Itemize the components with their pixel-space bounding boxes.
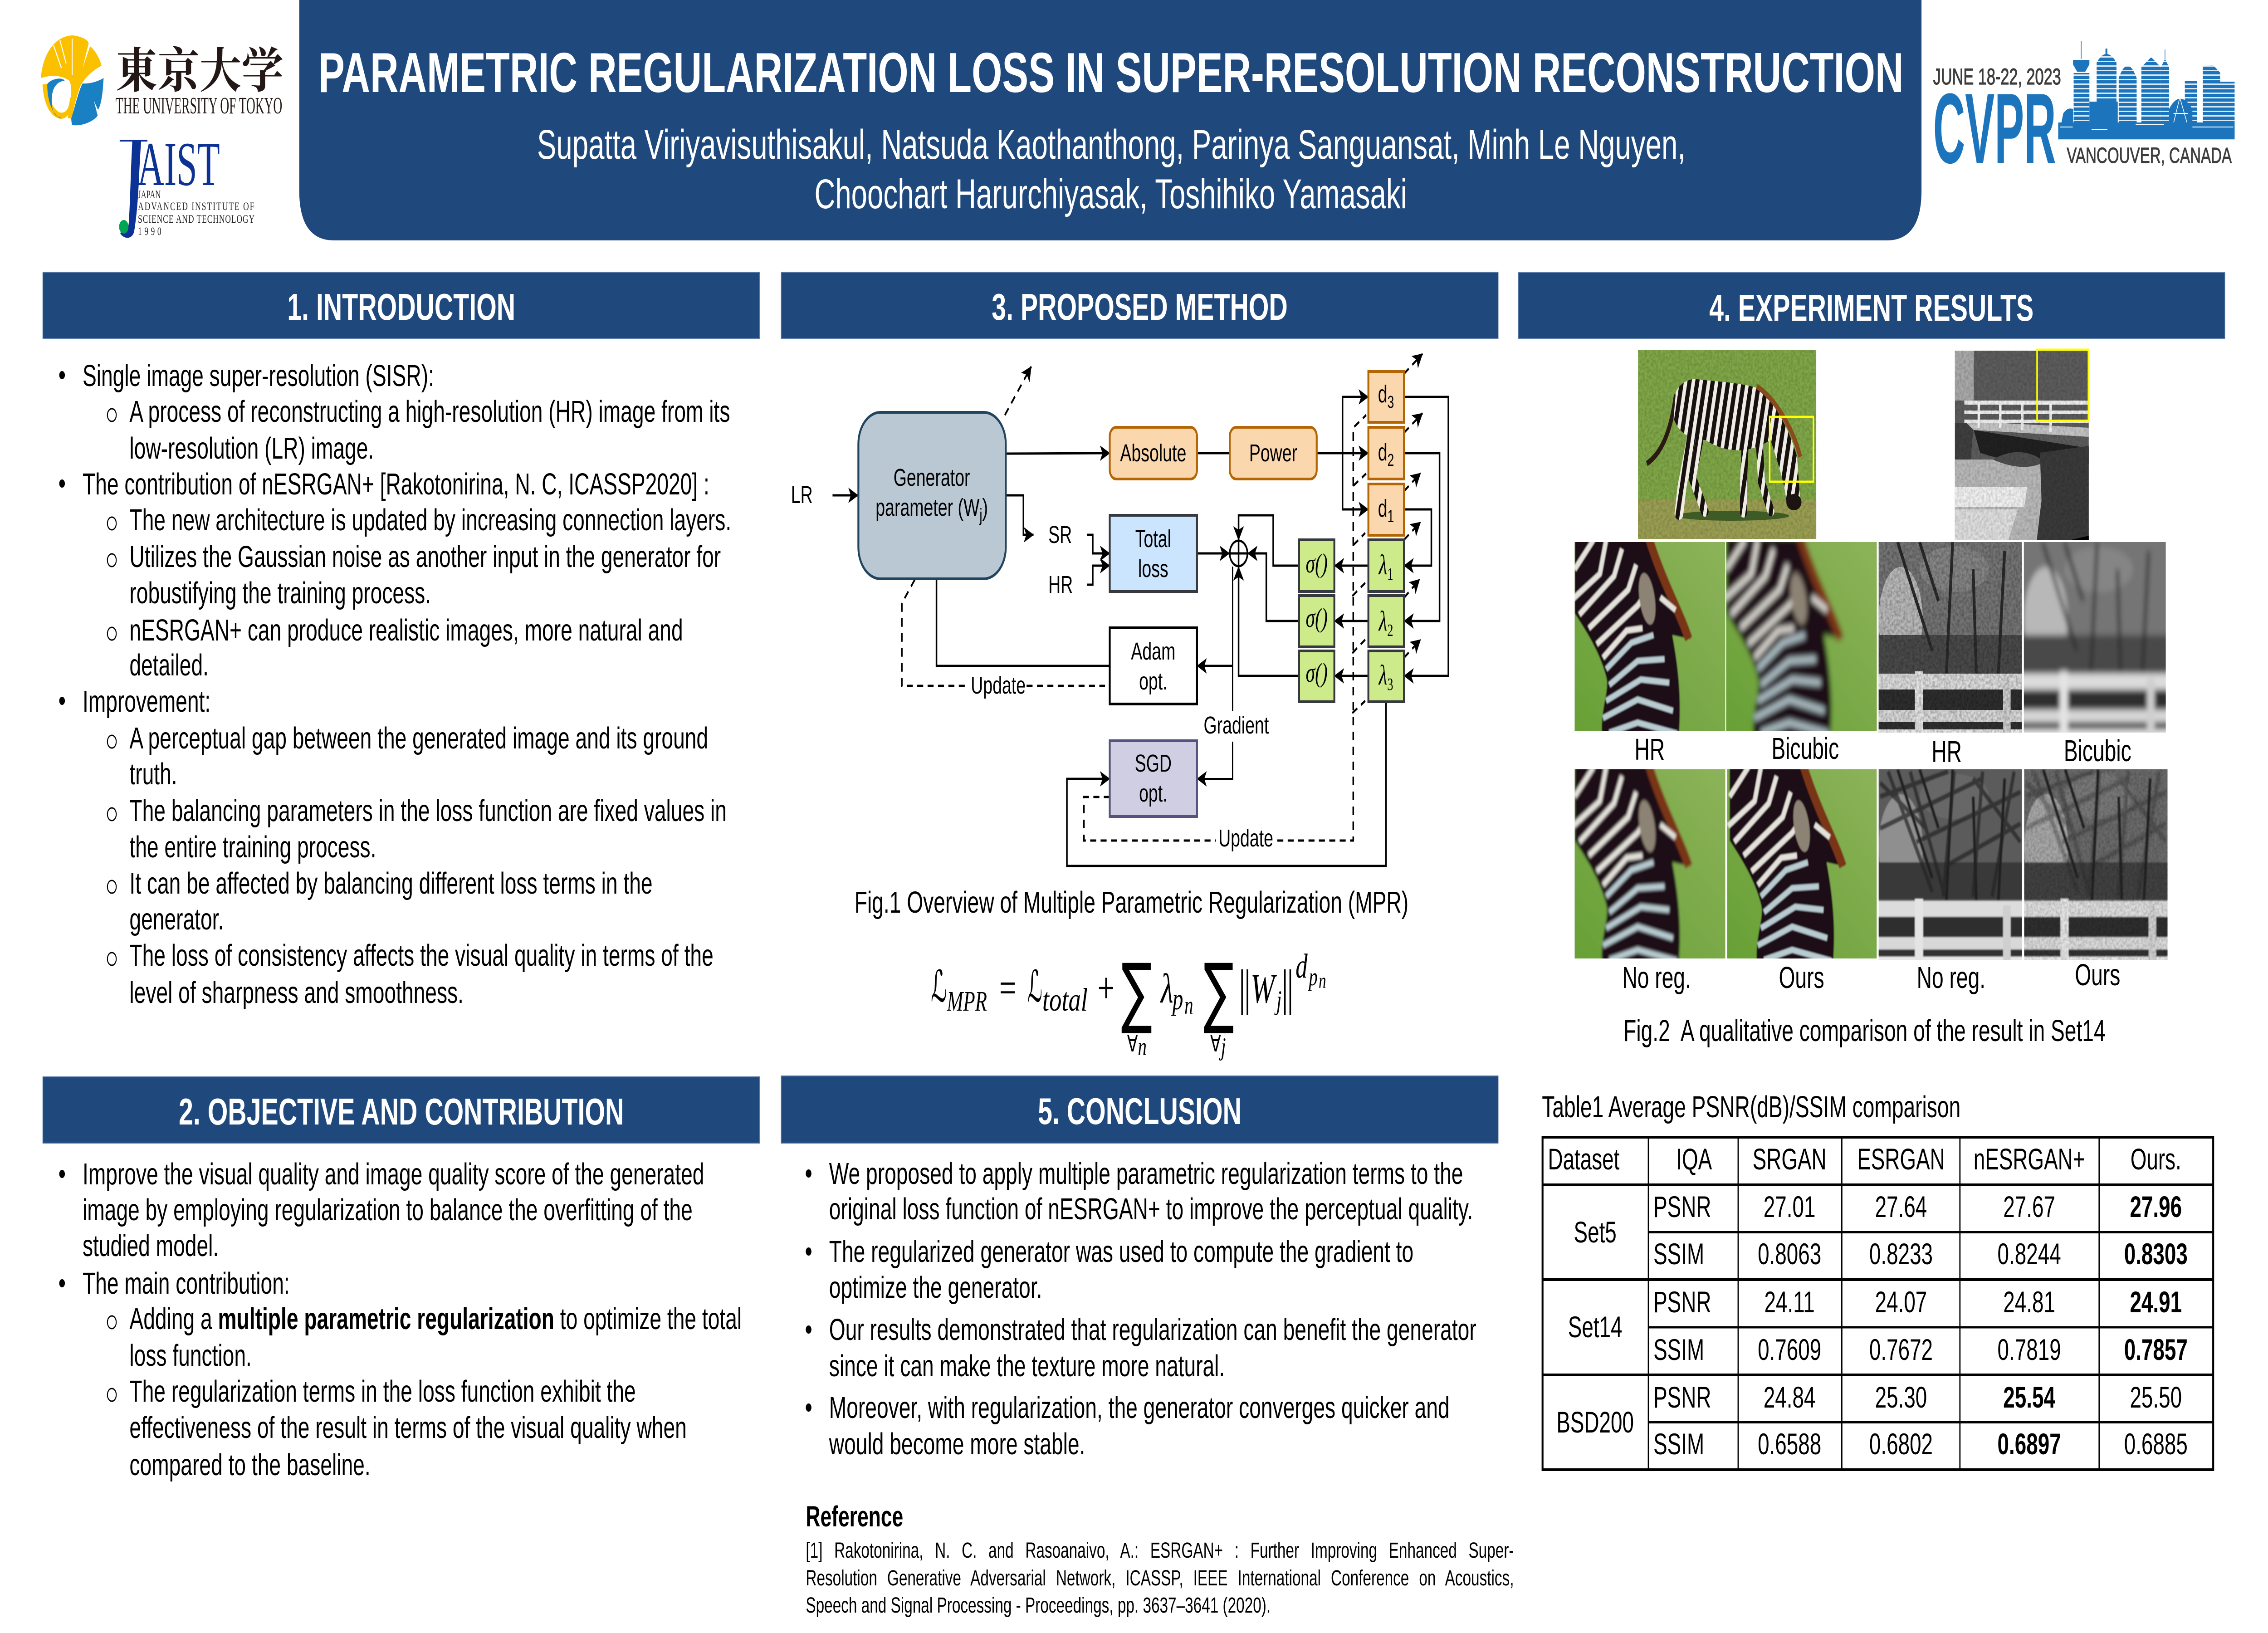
- formula: MPR loss: p: [1171, 982, 1183, 1016]
- label: gradient: Gradient: [1203, 711, 1269, 739]
- intro text: The balancing parameters in the loss function are fixed values in: [129, 794, 727, 828]
- boxes: sigma functions: σ(): [1306, 603, 1328, 633]
- image: zebra full: [1638, 350, 1816, 539]
- table rows: Set14: 24.81: [2003, 1286, 2055, 1319]
- intro text: Improvement:: [83, 685, 210, 719]
- formula: MPR loss: ∑: [1203, 947, 1234, 1037]
- box: power: Power: [1249, 439, 1297, 467]
- JAIST full name: 1990: [138, 225, 161, 238]
- letter J: [120, 140, 147, 238]
- boxes: sigma functions: σ(): [1306, 658, 1328, 688]
- bullet markers: [806, 1169, 811, 1412]
- intro text: detailed.: [129, 649, 209, 682]
- formula: MPR loss: MPR: [947, 985, 987, 1017]
- conclusion text: The regularized generator was used to compute the gradient to: [829, 1235, 1413, 1269]
- heading bar: [781, 272, 1498, 338]
- heading bar: [1518, 273, 2225, 338]
- formula: MPR loss: +: [1097, 963, 1114, 1012]
- image: zebra no-reg crop: [1565, 756, 1735, 973]
- table header row: IQA: [1676, 1143, 1712, 1176]
- table rows: BSD200: 24.84: [1764, 1381, 1815, 1414]
- table rows: Set5: [1574, 1191, 2188, 1271]
- heading bar: 1. INTRODUCTION: [287, 287, 515, 328]
- text block: reference citation: [1] Rakotonirina, N. C. and Rasoanaivo, A.: ESRGAN+ : Further Improving Enhanced Super-: [806, 1539, 1514, 1563]
- panel: 1. Introduction: [43, 272, 759, 1010]
- image: zebra bicubic crop: [1717, 528, 1887, 746]
- table rows: BSD200: 0.6885: [2124, 1428, 2188, 1461]
- logo: The University of Tokyo: [41, 33, 284, 125]
- formula: MPR loss: d: [1295, 948, 1308, 985]
- box: absolute: [1110, 427, 1197, 479]
- table rows: Set5: 27.96: [2130, 1191, 2182, 1224]
- table rows: Set5: 0.8244: [1998, 1238, 2061, 1271]
- heading bar: 5. CONCLUSION: [1038, 1091, 1242, 1133]
- boxes: lambda terms: 3: [1387, 675, 1393, 694]
- objective text: The main contribution:: [83, 1267, 290, 1301]
- boxes: sigma functions: [1299, 540, 1334, 702]
- objective text: [83, 1158, 742, 1482]
- table rows: BSD200: SSIM: [1653, 1428, 1704, 1461]
- JAIST full name: SCIENCE AND TECHNOLOGY: [138, 213, 254, 225]
- dashed update connectors: [902, 354, 1422, 841]
- table rows: Set5: 27.64: [1875, 1191, 1927, 1224]
- label: HR: HR: [1048, 571, 1073, 598]
- table rows: Set5: 0.8233: [1869, 1238, 1933, 1271]
- table rows: Set14: 0.7672: [1869, 1334, 1933, 1367]
- CVPR wordmark: CVPR: [1933, 73, 2056, 185]
- conclusion text: original loss function of nESRGAN+ to improve the perceptual quality.: [829, 1193, 1473, 1226]
- image: bridge no-reg crop: [1869, 756, 2033, 973]
- intro text: The new architecture is updated by increasing connection layers.: [129, 504, 731, 537]
- table header row: SRGAN: [1753, 1143, 1827, 1176]
- table rows: Set14: 24.91: [2130, 1286, 2182, 1319]
- formula: MPR loss: j: [1219, 1033, 1226, 1061]
- table header row: Ours.: [2131, 1143, 2181, 1176]
- table rows: Set14: Set14: [1568, 1311, 1623, 1344]
- heading bar: 3. PROPOSED METHOD: [992, 287, 1288, 328]
- intro text: level of sharpness and smoothness.: [129, 976, 464, 1010]
- intro text: low-resolution (LR) image.: [129, 432, 374, 465]
- intro text: A process of reconstructing a high-resolution (HR) image from its: [129, 395, 730, 429]
- boxes: d terms: d: [1378, 494, 1388, 522]
- image: zebra ours crop: [1720, 756, 1889, 973]
- formula: MPR loss: =: [999, 963, 1016, 1012]
- image: bridge bicubic crop: [2014, 528, 2177, 746]
- formula: MPR loss: ∀: [1210, 1031, 1221, 1057]
- table rows: BSD200: 0.6897: [1998, 1428, 2061, 1461]
- JAIST full name: [138, 188, 254, 238]
- diagram: MPR overview: [791, 354, 1448, 866]
- letters AIST: AIST: [137, 129, 220, 199]
- heading bar: [43, 1077, 759, 1143]
- image: zebra HR crop: [1575, 542, 1725, 731]
- caption: Table 1: Table1 Average PSNR(dB)/SSIM comparison: [1542, 1090, 1960, 1124]
- boxes: d terms: 1: [1388, 506, 1394, 526]
- table rows: Set5: 0.8303: [2124, 1238, 2188, 1271]
- table rows: Set5: Set5: [1574, 1216, 1617, 1249]
- marker: bridge zoom box: [2037, 350, 2088, 421]
- table rows: Set5: SSIM: [1653, 1238, 1704, 1271]
- box: Adam optimizer: [1110, 628, 1197, 704]
- box: power: [1230, 427, 1317, 479]
- table rows: Set5: PSNR: [1653, 1191, 1711, 1224]
- box: total loss: loss: [1138, 555, 1168, 582]
- authors: [537, 121, 1686, 217]
- box: SGD optimizer: opt.: [1139, 779, 1168, 807]
- formula: MPR loss: ℒ: [1027, 962, 1042, 1012]
- label: HR bridge: HR: [1931, 735, 1962, 769]
- formula: MPR loss: p: [1308, 963, 1318, 991]
- bullet markers: [59, 1170, 116, 1401]
- formula: MPR loss: total: [1042, 982, 1088, 1018]
- table rows: Set14: [1568, 1286, 2188, 1367]
- conclusion text: Our results demonstrated that regularization can benefit the generator: [829, 1313, 1476, 1347]
- table rows: BSD200: 25.30: [1875, 1381, 1927, 1414]
- objective text: The regularization terms in the loss function exhibit the: [129, 1375, 636, 1408]
- box: generator parameter: parameter (W: [875, 494, 979, 521]
- location: VANCOUVER, CANADA: [2067, 143, 2232, 167]
- conclusion text: since it can make the texture more natural.: [829, 1349, 1225, 1383]
- label: no reg bridge: No reg.: [1917, 961, 1985, 995]
- panel: poster header: [299, 0, 1921, 240]
- boxes: lambda terms: λ: [1379, 659, 1387, 691]
- label: update left: Update: [971, 671, 1026, 699]
- intro text: the entire training process.: [129, 831, 376, 864]
- panel: 4. Experiment results: [1518, 273, 2225, 1470]
- label: SR: SR: [1048, 521, 1072, 548]
- JAIST full name: ADVANCED INSTITUTE OF: [138, 200, 254, 213]
- intro text: [83, 359, 731, 1010]
- box: generator parameter: j: [979, 505, 982, 525]
- boxes: lambda terms: λ: [1379, 605, 1387, 637]
- label: HR zebra: HR: [1634, 733, 1665, 767]
- table rows: BSD200: PSNR: [1653, 1381, 1711, 1414]
- table rows: Set14: PSNR: [1653, 1286, 1711, 1319]
- intro text: The loss of consistency affects the visual quality in terms of the: [129, 939, 714, 973]
- panel: 2. Objective and contribution: [43, 1077, 759, 1482]
- caption: Fig.1: Fig.1 Overview of Multiple Parametric Regularization (MPR): [855, 886, 1408, 919]
- formula: MPR loss: n: [1184, 992, 1193, 1020]
- logo: JAIST: [119, 129, 254, 238]
- label: bicubic bridge: Bicubic: [2064, 734, 2131, 768]
- boxes: d terms: [1369, 372, 1404, 535]
- box: generator parameter: ): [982, 494, 988, 521]
- text block: reference citation: Resolution Generative Adversarial Network, ICASSP, IEEE International Conference on Acoustics,: [806, 1566, 1514, 1590]
- text block: reference citation: Speech and Signal Processing - Proceedings, pp. 3637–3641 (2020).: [806, 1594, 1271, 1618]
- table header row: ESRGAN: [1857, 1143, 1945, 1176]
- formula: MPR loss: n: [1138, 1033, 1147, 1061]
- kanji wordmark: 東京大学: [116, 33, 284, 102]
- authors: Supatta Viriyavisuthisakul, Natsuda Kaothanthong, Parinya Sanguansat, Minh Le Nguyen,: [537, 121, 1686, 168]
- table rows: Set14: 0.7857: [2124, 1334, 2188, 1367]
- intro text: generator.: [129, 903, 224, 936]
- title: PARAMETRIC REGULARIZATION LOSS IN SUPER-RESOLUTION RECONSTRUCTION: [318, 41, 1904, 104]
- heading bar: 4. EXPERIMENT RESULTS: [1709, 288, 2033, 329]
- table header row: nESRGAN+: [1974, 1143, 2085, 1176]
- table rows: Set5: 0.8063: [1758, 1238, 1821, 1271]
- formula: MPR loss: j: [1274, 986, 1281, 1016]
- boxes: lambda terms: [1369, 540, 1404, 702]
- conclusion text: We proposed to apply multiple parametric regularization terms to the: [829, 1157, 1463, 1191]
- panel: 5. Conclusion: [781, 1076, 1514, 1621]
- boxes: lambda terms: 1: [1387, 565, 1393, 584]
- box: Adam optimizer: opt.: [1139, 667, 1168, 695]
- box: generator parameter: Generator: [894, 464, 970, 491]
- label: ours bridge: Ours: [2075, 958, 2120, 992]
- objective text: image by employing regularization to balance the overfitting of the: [83, 1193, 693, 1227]
- marker: zebra zoom box: [1769, 417, 1813, 482]
- date: JUNE 18-22, 2023: [1933, 64, 2061, 90]
- label: update bottom: Update: [1218, 824, 1273, 852]
- table rows: Set14: 0.7609: [1758, 1334, 1821, 1367]
- sub-bullet markers: [108, 409, 116, 965]
- intro text: It can be affected by balancing different loss terms in the: [129, 867, 653, 900]
- box: SGD optimizer: SGD: [1135, 749, 1172, 777]
- boxes: d terms: d: [1378, 380, 1388, 408]
- boxes: lambda terms: 2: [1387, 621, 1393, 640]
- label: no reg zebra: No reg.: [1622, 961, 1691, 995]
- intro text: The contribution of nESRGAN+ [Rakotonirina, N. C, ICASSP2020] :: [83, 468, 709, 501]
- intro text: A perceptual gap between the generated image and its ground: [129, 722, 708, 755]
- box: absolute: Absolute: [1120, 439, 1186, 467]
- panel: 3. Proposed method: [781, 272, 1498, 1061]
- logo: CVPR 2023: [1933, 41, 2234, 185]
- table rows: Set5: 27.01: [1764, 1191, 1815, 1224]
- objective text: loss function.: [129, 1339, 252, 1373]
- table rows: BSD200: 25.54: [2003, 1381, 2055, 1414]
- formula: MPR loss: ℒ: [931, 962, 947, 1012]
- formula: MPR loss: λ: [1160, 966, 1173, 1012]
- icon: Vancouver skyline: [2058, 41, 2234, 140]
- objective text: Improve the visual quality and image quality score of the generated: [83, 1158, 704, 1191]
- table rows: Set14: 0.7819: [1998, 1334, 2061, 1367]
- objective text: studied model.: [83, 1229, 219, 1263]
- conclusion text: optimize the generator.: [829, 1271, 1042, 1305]
- intro text: robustifying the training process.: [129, 577, 431, 610]
- table rows: Set14: 24.11: [1765, 1286, 1815, 1319]
- green dot: [119, 220, 128, 234]
- box: total loss: Total: [1135, 525, 1171, 552]
- intro text: nESRGAN+ can produce realistic images, more natural and: [129, 614, 683, 647]
- formula: MPR loss: [931, 947, 1326, 1061]
- boxes: d terms: 3: [1388, 392, 1394, 411]
- heading bar: [781, 1076, 1498, 1143]
- label: bicubic zebra: Bicubic: [1771, 732, 1839, 766]
- table rows: BSD200: 25.50: [2130, 1381, 2182, 1414]
- formula: MPR loss: W: [1251, 966, 1277, 1012]
- table rows: BSD200: 0.6802: [1869, 1428, 1933, 1461]
- intro text: Single image super-resolution (SISR):: [83, 359, 434, 393]
- bullet markers: [59, 371, 65, 705]
- boxes: lambda terms: λ: [1379, 549, 1387, 581]
- table rows: BSD200: BSD200: [1556, 1406, 1634, 1439]
- conclusion text: Moreover, with regularization, the generator converges quicker and: [829, 1391, 1450, 1425]
- icon: ginkgo emblem: [41, 35, 103, 125]
- objective text: Adding a multiple parametric regularization to optimize the total: [129, 1302, 742, 1336]
- table rows: BSD200: 0.6588: [1758, 1428, 1821, 1461]
- objective text: compared to the baseline.: [129, 1448, 371, 1482]
- header banner background: [299, 0, 1921, 240]
- table header row: Dataset: [1548, 1143, 1620, 1176]
- label: ours zebra: Ours: [1779, 961, 1824, 995]
- image: bridge HR crop: [1869, 528, 2033, 746]
- JAIST full name: JAPAN: [138, 188, 161, 201]
- table rows: Set14: SSIM: [1653, 1334, 1704, 1367]
- heading: reference: Reference: [806, 1500, 903, 1533]
- authors: Choochart Harurchiyasak, Toshihiko Yamasaki: [814, 170, 1407, 217]
- image: bridge full: [1955, 351, 2089, 540]
- English wordmark: THE UNIVERSITY OF TOKYO: [116, 93, 282, 119]
- box: generator parameter: [858, 412, 1006, 579]
- table: PSNR / SSIM comparison: [1543, 1137, 2213, 1470]
- formula: MPR loss: ∀: [1127, 1031, 1138, 1057]
- table rows: BSD200: [1556, 1381, 2188, 1461]
- conclusion text: would become more stable.: [829, 1428, 1085, 1461]
- table rows: Set5: 27.67: [2003, 1191, 2055, 1224]
- conclusion text: [829, 1157, 1476, 1461]
- label: LR: LR: [791, 481, 813, 508]
- image: bridge ours crop: [2015, 756, 2179, 973]
- heading bar: 2. OBJECTIVE AND CONTRIBUTION: [179, 1091, 624, 1133]
- icon: sum node: [1230, 541, 1247, 566]
- heading bar: [43, 272, 759, 338]
- box: total loss: [1110, 515, 1197, 592]
- intro text: truth.: [129, 758, 177, 791]
- box: Adam optimizer: Adam: [1131, 637, 1175, 665]
- boxes: d terms: d: [1378, 438, 1388, 466]
- boxes: d terms: 2: [1388, 450, 1394, 469]
- table grid: [1543, 1137, 2213, 1470]
- table header row: [1548, 1143, 2181, 1176]
- table rows: Set14: 24.07: [1875, 1286, 1927, 1319]
- box: SGD optimizer: [1110, 741, 1197, 816]
- objective text: effectiveness of the result in terms of the visual quality when: [129, 1411, 687, 1445]
- caption: Fig.2: Fig.2 A qualitative comparison of the result in Set14: [1623, 1014, 2106, 1048]
- intro text: Utilizes the Gaussian noise as another input in the generator for: [129, 540, 721, 574]
- boxes: sigma functions: σ(): [1306, 549, 1328, 579]
- text block: reference citation: [806, 1537, 1514, 1621]
- formula: MPR loss: ∑: [1121, 947, 1152, 1037]
- solid connectors: [832, 397, 1448, 866]
- formula: MPR loss: n: [1319, 968, 1326, 993]
